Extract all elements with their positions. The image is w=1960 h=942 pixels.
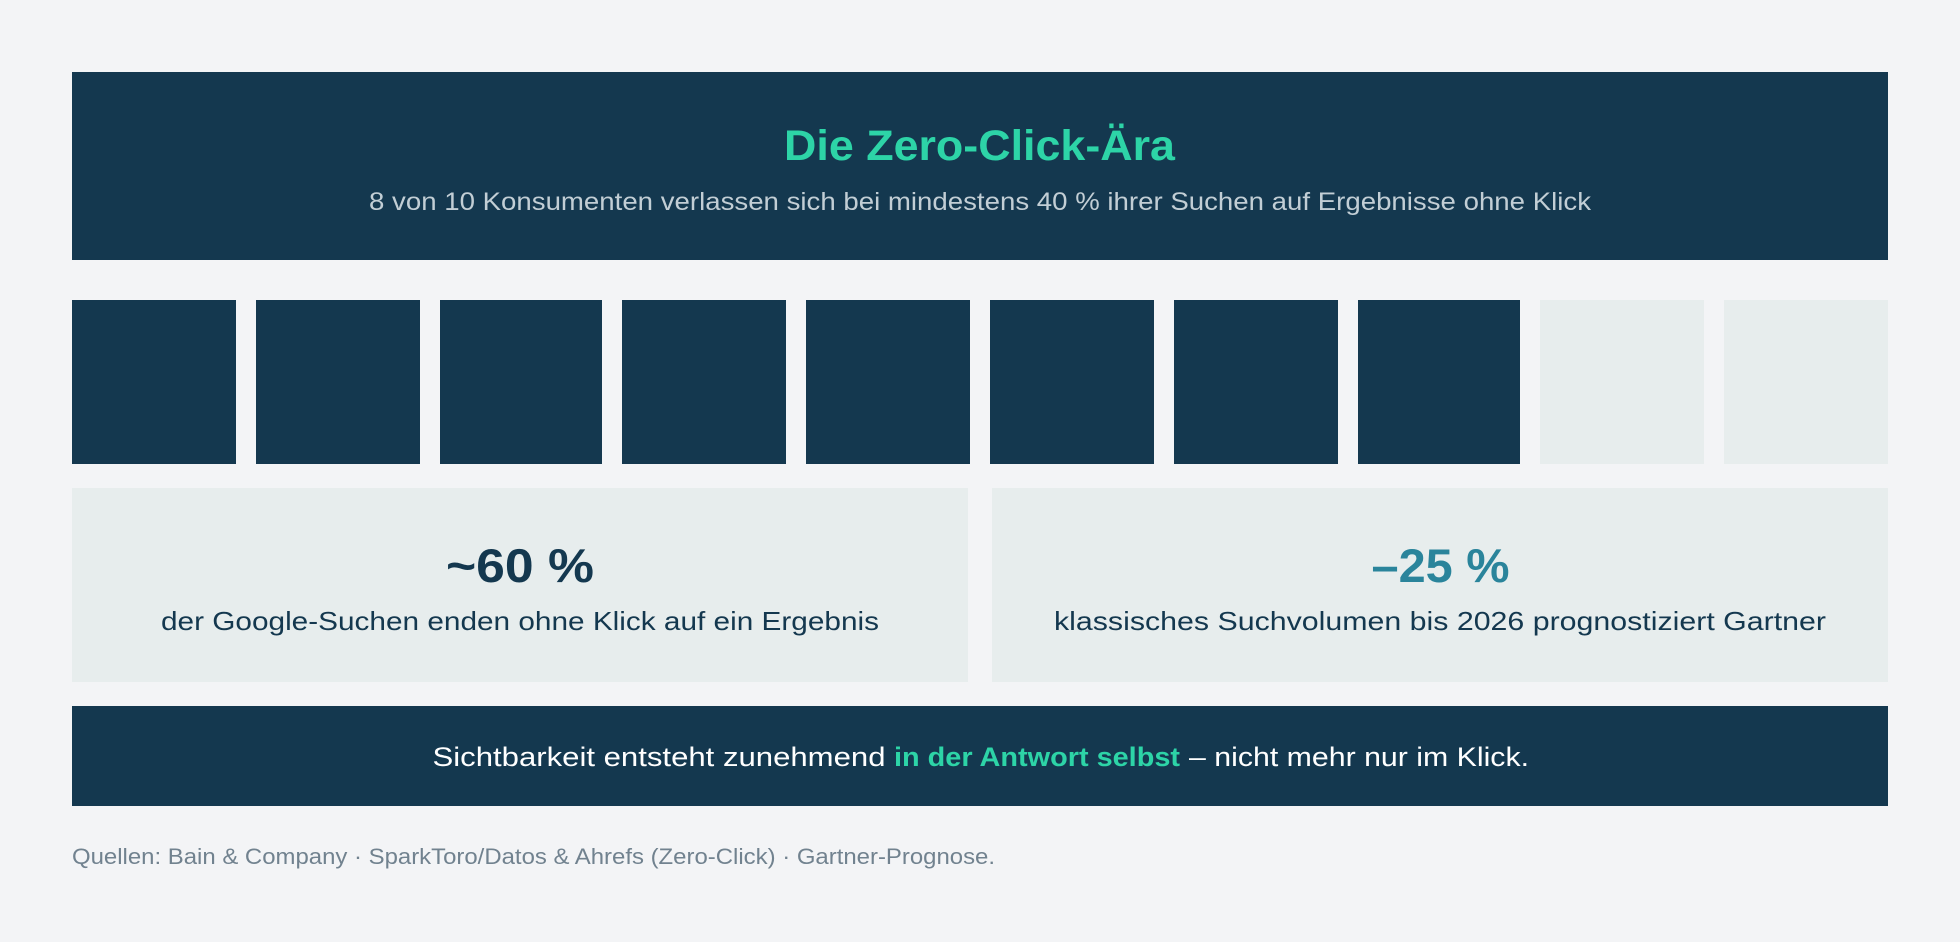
- takeaway text: [432, 742, 1529, 772]
- takeaway text: – nicht mehr nur im Klick.: [1189, 742, 1529, 772]
- subtitle: 8 von 10 Konsumenten verlassen sich bei mindestens 40 % ihrer Suchen auf Ergebnisse ohne Klick: [369, 188, 1592, 216]
- panel: takeaway bar: [72, 706, 1888, 806]
- stat number: –25 %: [1372, 539, 1510, 592]
- stat description: der Google-Suchen enden ohne Klick auf ein Ergebnis: [161, 606, 879, 636]
- panel: header: [72, 72, 1888, 260]
- chart: 8 of 10 squares: [72, 300, 1888, 464]
- panel: stat 60 percent: [72, 488, 968, 682]
- title: Die Zero-Click-Ära: [784, 122, 1176, 170]
- stat number: ~60 %: [446, 539, 594, 592]
- takeaway text: Sichtbarkeit entsteht zunehmend: [432, 742, 886, 772]
- stat description: klassisches Suchvolumen bis 2026 prognostiziert Gartner: [1054, 606, 1826, 636]
- source note: Quellen: Bain & Company · SparkToro/Datos & Ahrefs (Zero-Click) · Gartner-Prognose.: [72, 844, 995, 869]
- takeaway text: in der Antwort selbst: [894, 742, 1180, 772]
- panel: stat minus 25 percent: [992, 488, 1888, 682]
